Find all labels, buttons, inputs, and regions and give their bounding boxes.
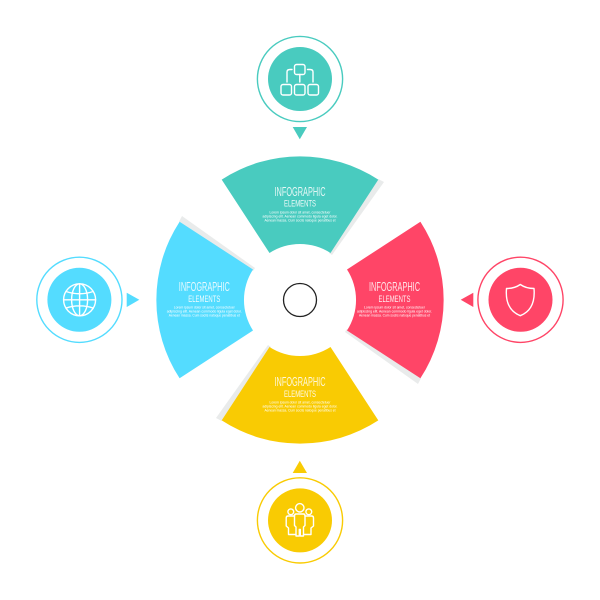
text: yellow sector: INFOGRAPHIC [274,375,326,389]
text: yellow sector: Aenean massa. Cum sociis natoque penatibus et [264,408,336,413]
badge: left blue globe [37,257,122,342]
text: blue sector [167,280,242,318]
text: red sector: ELEMENTS [378,294,410,304]
text: blue sector: INFOGRAPHIC [179,280,230,294]
text: teal sector: adipiscing elit. Aenean commodo ligula eget dolor. [262,213,338,218]
text: blue sector: adipiscing elit. Aenean commodo ligula eget dolor. [167,308,242,313]
arrow: right [461,293,473,307]
text: yellow sector [262,375,338,413]
sector: teal top [222,156,384,255]
text: yellow sector: adipiscing elit. Aenean commodo ligula eget dolor. [262,403,338,408]
text: blue sector: Lorem ipsum dolor sit amet, consectetuer [174,304,235,309]
badge: right red shield [478,257,563,342]
text: red sector: Aenean massa. Cum sociis natoque penatibus et [359,313,431,318]
sector: red right [345,222,444,384]
text: teal sector: Lorem ipsum dolor sit amet, consectetuer [270,209,331,214]
badge: top teal hierarchy [257,36,343,122]
text: yellow sector: Lorem ipsum dolor sit amet, consectetuer [270,399,331,404]
badge: bottom yellow people [257,478,343,563]
arrow: left [127,293,139,307]
text: teal sector: Aenean massa. Cum sociis natoque penatibus et [264,218,336,223]
text: blue sector: Aenean massa. Cum sociis natoque penatibus et [169,313,241,318]
text: teal sector [262,185,338,223]
arrow: top [293,127,307,139]
icon: globe [64,284,96,316]
text: red sector: Lorem ipsum dolor sit amet, consectetuer [364,304,426,309]
arrow: bottom [293,461,307,473]
icon: people [286,504,314,536]
text: yellow sector: ELEMENTS [284,389,316,399]
sector: blue left [156,216,255,378]
text: teal sector: INFOGRAPHIC [274,185,326,199]
text: red sector: INFOGRAPHIC [369,280,420,294]
text: red sector: adipiscing elit. Aenean commodo ligula eget dolor. [357,308,432,313]
text: red sector [357,280,432,318]
text: teal sector: ELEMENTS [284,199,316,209]
text: blue sector: ELEMENTS [188,294,220,304]
icon: hierarchy [281,64,318,95]
icon: shield [506,284,534,316]
sector: yellow bottom [216,345,378,444]
center ring [284,284,316,316]
